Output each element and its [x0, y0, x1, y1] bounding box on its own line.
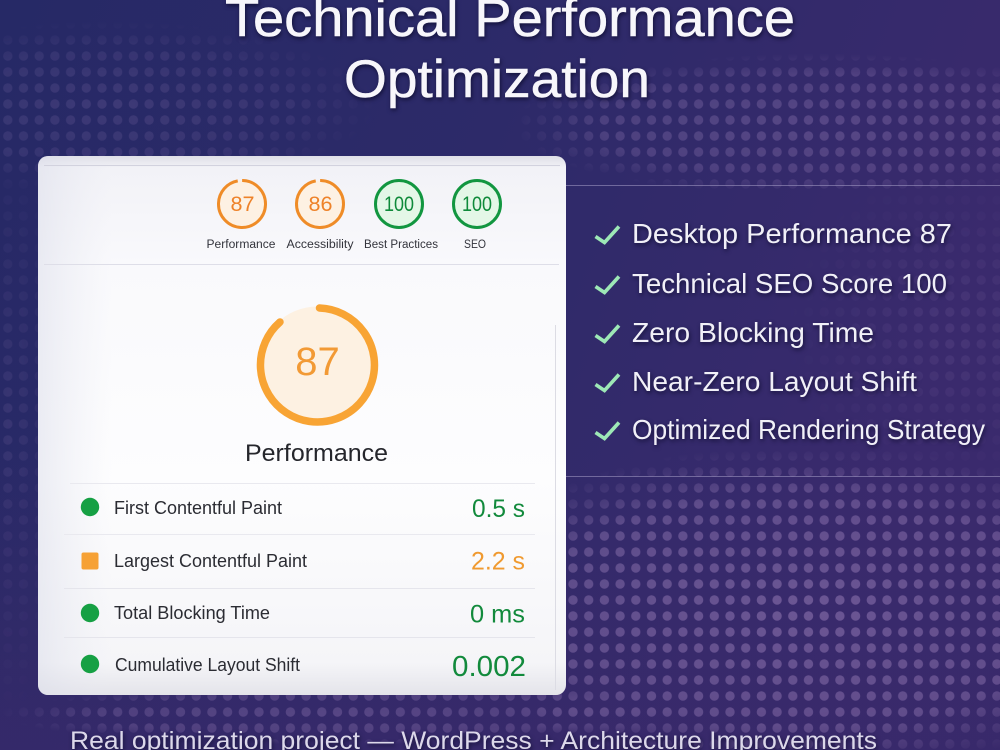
metric: largest contentful paint: Largest Contentful Paint — [114, 550, 307, 571]
item: layout shift: Near-Zero Layout Shift — [632, 366, 917, 397]
metric: cumulative layout shift: 0.002 — [452, 651, 526, 683]
item: rendering strategy: Optimized Rendering Strategy — [632, 414, 985, 445]
title: Optimization — [344, 50, 650, 109]
score: performance 87 — [206, 180, 276, 251]
score: seo 100: SEO — [464, 239, 486, 251]
item: desktop performance: Desktop Performance 87 — [632, 218, 952, 249]
metric: total blocking time — [81, 600, 525, 628]
metric: first contentful paint: First Contentful Paint — [114, 497, 282, 518]
main performance gauge: 87 — [295, 340, 340, 384]
main performance gauge — [260, 306, 376, 422]
score: best practices 100: Best Practices — [364, 239, 438, 251]
item: zero blocking: Zero Blocking Time — [632, 317, 874, 348]
score: best practices 100 — [364, 180, 438, 251]
score: seo 100: 100 — [462, 193, 492, 216]
item: technical seo: Technical SEO Score 100 — [632, 268, 947, 299]
metric: cumulative layout shift — [81, 651, 526, 683]
metric: first contentful paint: 0.5 s — [472, 495, 525, 523]
title — [225, 0, 795, 109]
gauge label: Performance — [245, 440, 388, 467]
score: seo 100 — [454, 180, 500, 251]
checklist — [596, 218, 985, 445]
metric: cumulative layout shift: Cumulative Layout Shift — [115, 654, 300, 675]
score: accessibility 86 — [286, 180, 354, 251]
score: accessibility 86: 86 — [308, 193, 332, 216]
score: accessibility 86: Accessibility — [286, 239, 354, 251]
panel: lighthouse report card — [38, 156, 566, 695]
score: best practices 100: 100 — [384, 193, 414, 216]
metric: largest contentful paint: 2.2 s — [471, 548, 525, 576]
metric: first contentful paint — [81, 495, 525, 523]
metric: total blocking time: 0 ms — [470, 600, 525, 628]
metric: total blocking time: Total Blocking Time — [114, 602, 270, 623]
score: performance 87: Performance — [206, 239, 276, 251]
score: performance 87: 87 — [230, 193, 254, 216]
metric: largest contentful paint — [82, 548, 525, 576]
